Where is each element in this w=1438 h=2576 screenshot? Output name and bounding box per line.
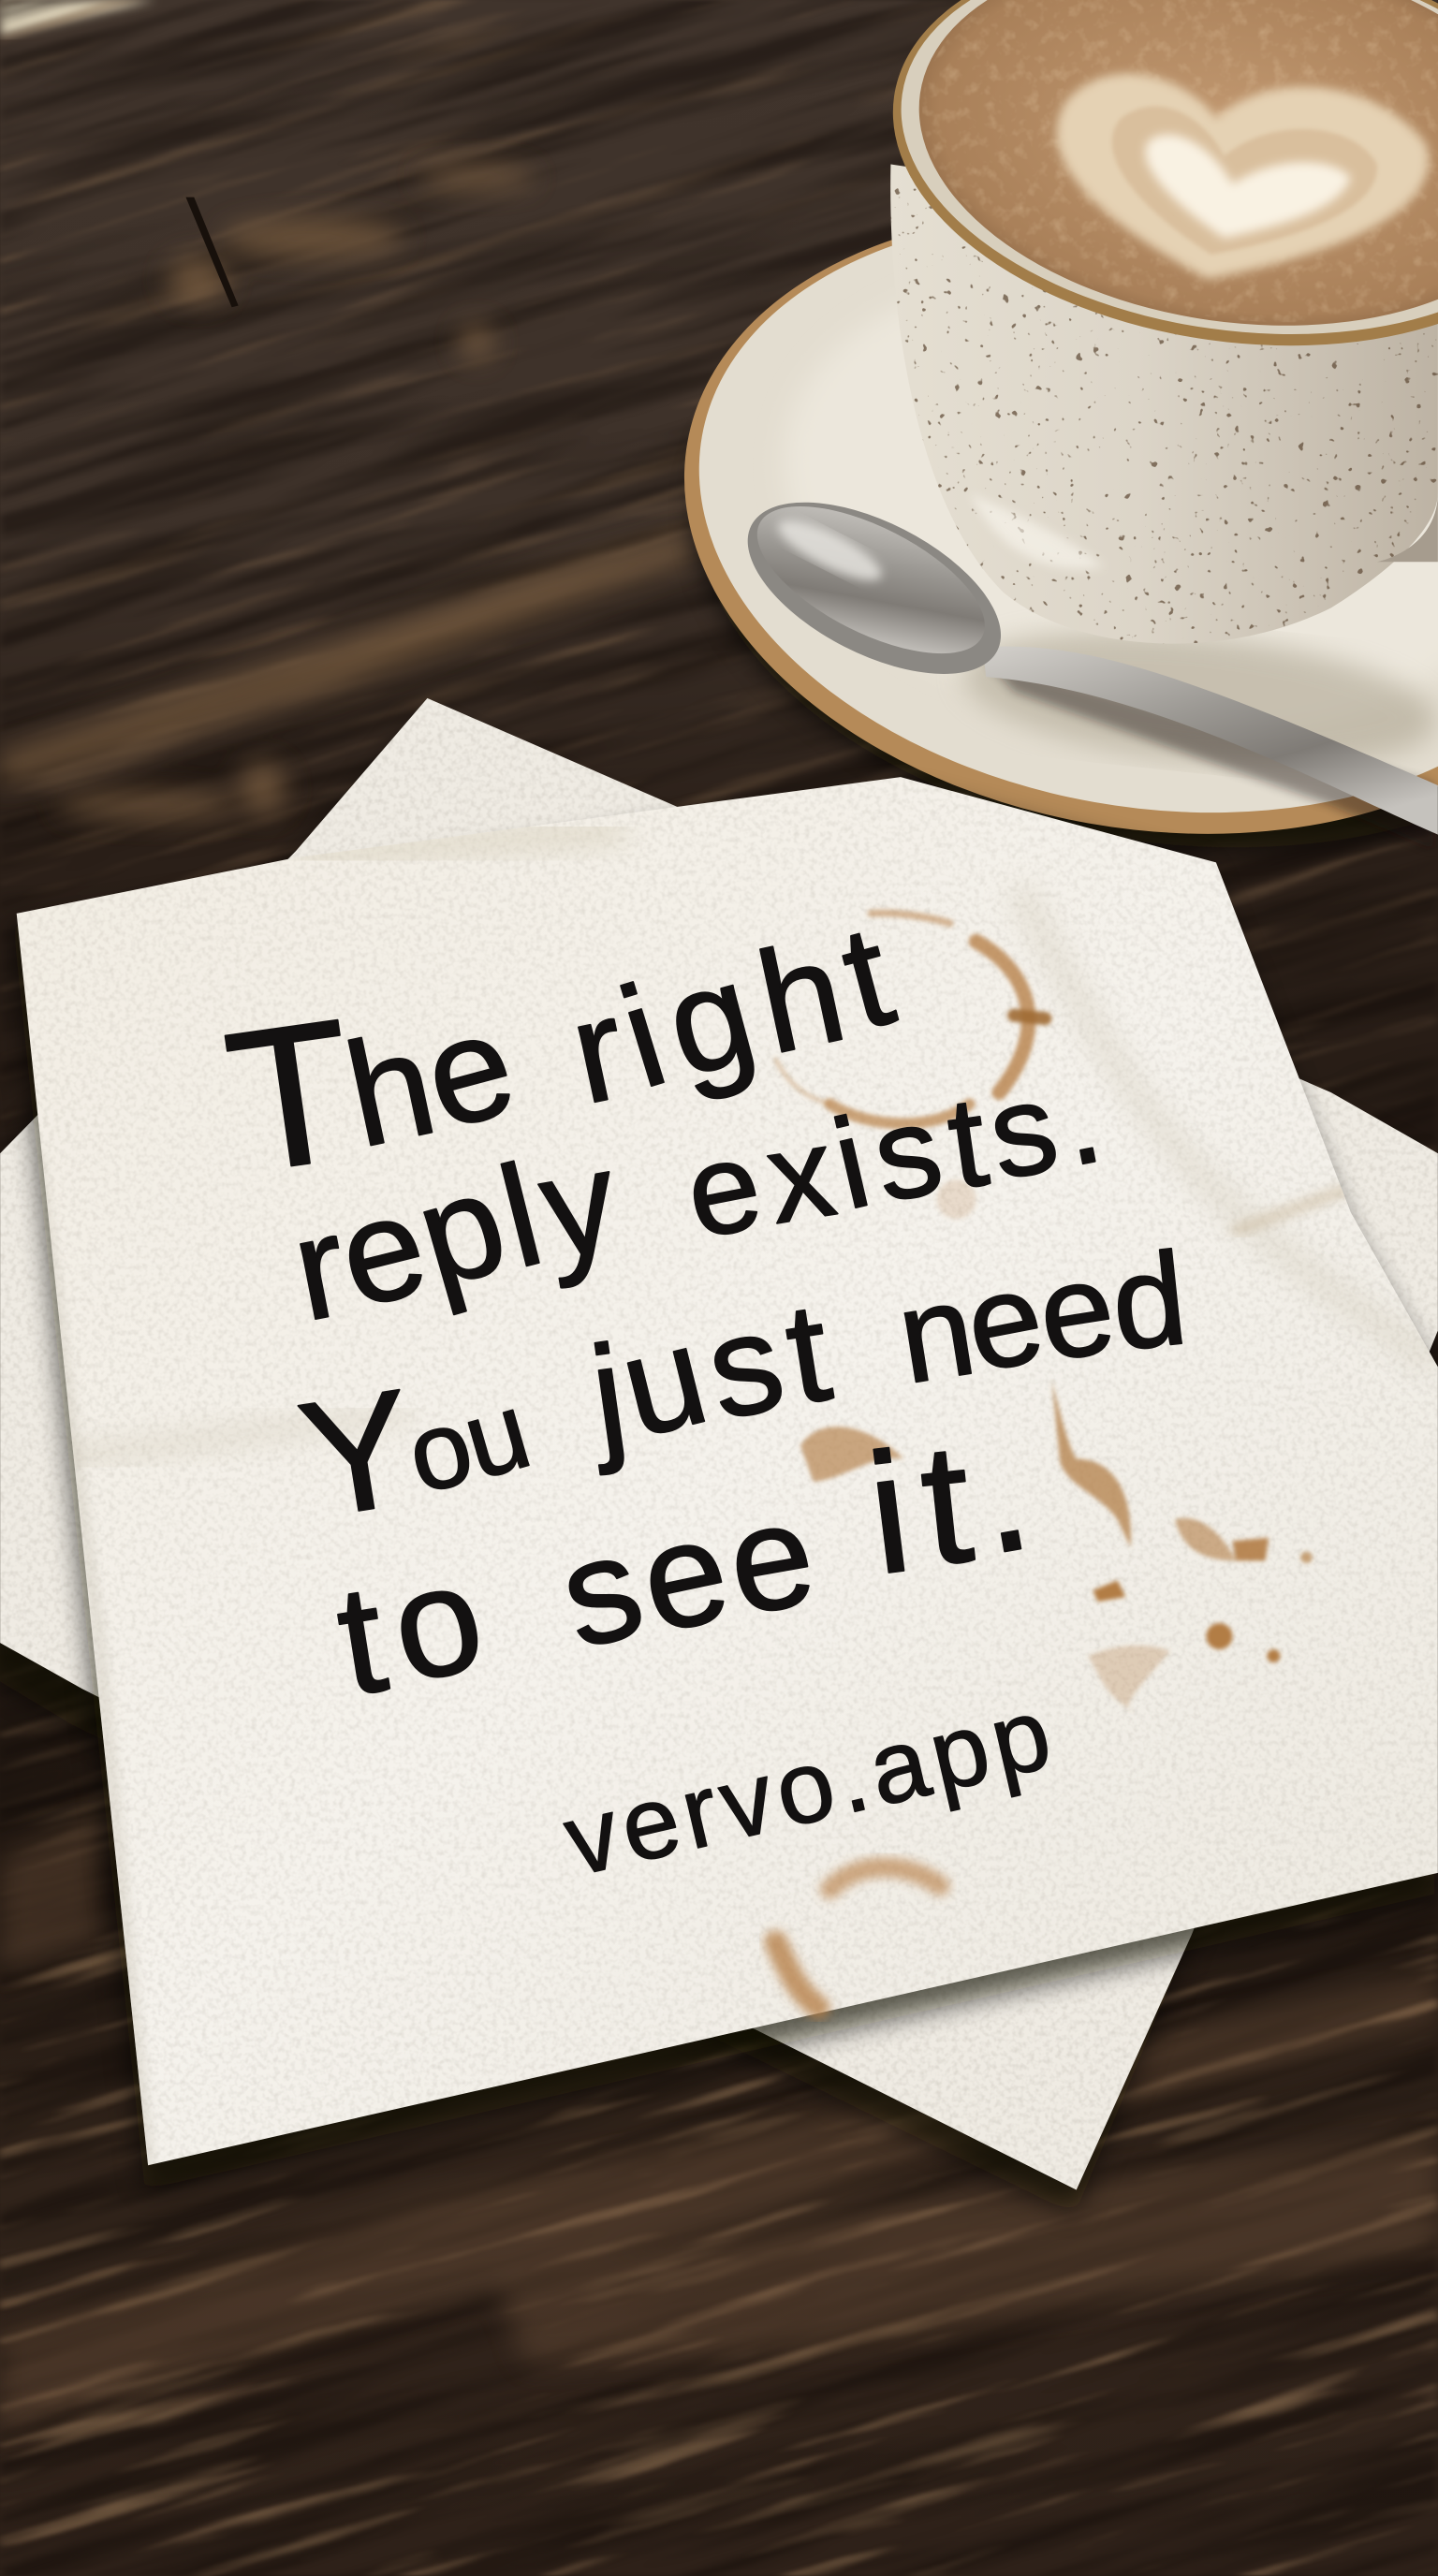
handwritten message (199, 892, 1200, 1898)
lower ring stain (776, 1867, 940, 2008)
cup rim (867, 0, 1438, 388)
word: just: just (567, 1266, 847, 1478)
saucer (635, 141, 1438, 906)
spill stains and drops (800, 1179, 1313, 1712)
word: to: to (317, 1529, 497, 1730)
word: see: see (543, 1464, 831, 1685)
word: The: The (199, 936, 536, 1224)
word: exists.: exists. (675, 1046, 1112, 1268)
latte surface with heart art (894, 0, 1438, 364)
word: need: need (888, 1218, 1200, 1414)
word: vervo.app: vervo.app (554, 1676, 1061, 1898)
spoon (722, 467, 1438, 849)
word: it.: it. (849, 1394, 1043, 1614)
cup body (888, 165, 1438, 657)
word: reply: reply (271, 1110, 638, 1356)
coffee ring stain (776, 913, 1045, 1123)
word: You: You (277, 1323, 548, 1560)
word: right: right (550, 892, 908, 1138)
coffee cup (867, 0, 1438, 657)
coffee stains (776, 913, 1313, 2008)
